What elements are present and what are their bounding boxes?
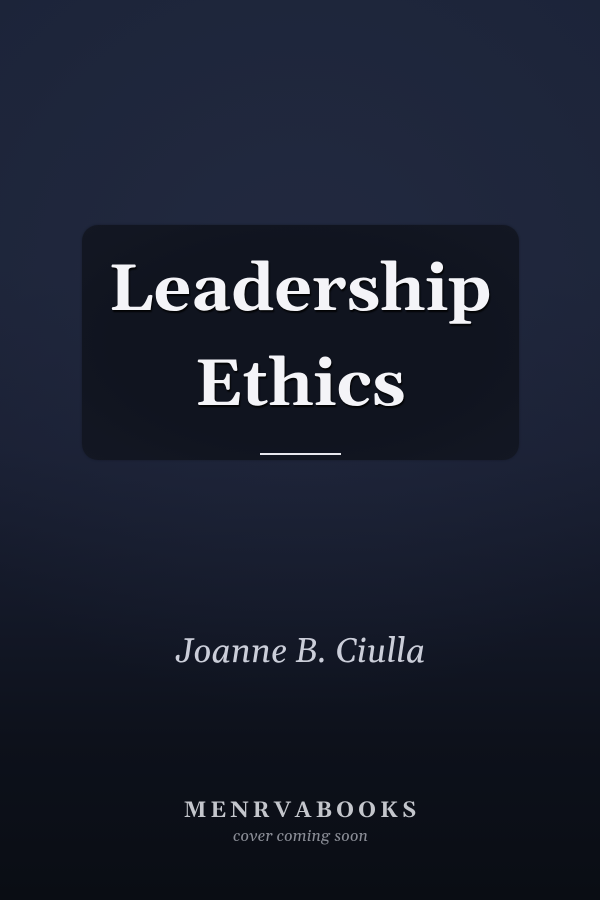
title panel bbox=[82, 225, 519, 460]
author name: Joanne B. Ciulla bbox=[176, 630, 425, 674]
title: Ethics bbox=[195, 344, 405, 428]
title: Leadership bbox=[108, 249, 492, 333]
title underline bbox=[260, 453, 341, 455]
cover note: cover coming soon bbox=[233, 827, 368, 847]
title bbox=[108, 249, 492, 428]
publisher name: MENRVABOOKS bbox=[184, 797, 420, 825]
